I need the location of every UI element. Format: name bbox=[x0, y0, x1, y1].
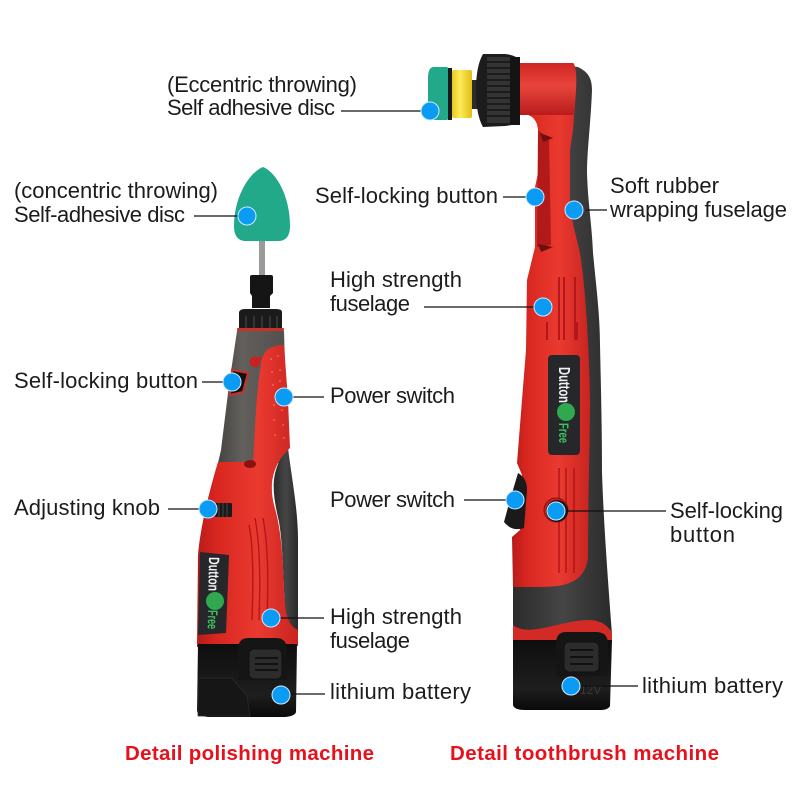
label: high strength fuselage, polishing machine: High strength bbox=[330, 604, 462, 629]
label: soft rubber: Soft rubber bbox=[610, 173, 719, 198]
label: power switch, polishing machine: Power switch bbox=[330, 383, 455, 408]
adjusting knob bbox=[215, 503, 232, 517]
label: high strength fuselage, toothbrush machine: fuselage bbox=[330, 291, 410, 316]
leader lines bbox=[168, 111, 666, 694]
label: eccentric disc: (Eccentric throwing) bbox=[167, 72, 357, 97]
flat green sponge bbox=[428, 67, 450, 120]
yellow pad bbox=[452, 70, 472, 118]
neck shading bbox=[537, 130, 551, 247]
label: eccentric disc: Self adhesive disc bbox=[167, 95, 335, 120]
screw hole bbox=[244, 460, 256, 468]
label: self-locking button, toothbrush machine body: button bbox=[670, 522, 735, 547]
neck notches bbox=[538, 133, 553, 252]
battery: 12V bbox=[580, 683, 601, 697]
dark back shell bbox=[513, 66, 612, 635]
label: soft rubber: wrapping fuselage bbox=[609, 197, 787, 222]
power switch bbox=[504, 473, 527, 529]
self-locking button bbox=[544, 498, 568, 522]
vent lines lower bbox=[559, 468, 574, 573]
label: eccentric disc bbox=[167, 72, 357, 120]
label: power switch, toothbrush machine: Power switch bbox=[330, 487, 455, 512]
label: high strength fuselage, toothbrush machine: High strength bbox=[330, 267, 462, 292]
polishing machine illustration bbox=[197, 167, 298, 717]
label: soft rubber bbox=[609, 173, 787, 222]
toothbrush machine illustration bbox=[428, 54, 612, 710]
logo panel bbox=[198, 552, 229, 635]
logo panel: Free bbox=[205, 610, 221, 629]
collar bbox=[239, 309, 282, 328]
label: self-locking button, toothbrush machine body: Self-locking bbox=[670, 498, 783, 523]
callout dots bbox=[199, 102, 583, 704]
label: concentric disc: Self-adhesive disc bbox=[14, 202, 185, 227]
self-locking button bbox=[230, 370, 248, 395]
battery bbox=[197, 638, 297, 717]
title: toothbrush machine: Detail toothbrush machine bbox=[450, 742, 719, 765]
label: concentric disc bbox=[14, 178, 218, 227]
red body bbox=[197, 345, 298, 649]
grip tab bbox=[250, 357, 262, 367]
label: high strength fuselage, polishing machine: fuselage bbox=[330, 628, 410, 653]
black knurled knob bbox=[476, 54, 520, 127]
vent lines upper bbox=[547, 277, 577, 340]
red stripe bbox=[513, 620, 612, 640]
battery bbox=[513, 632, 612, 710]
label: lithium battery, toothbrush machine: lithium battery bbox=[642, 673, 783, 698]
conical green sponge disc bbox=[234, 167, 290, 241]
logo panel: Free bbox=[556, 423, 572, 443]
metal shaft bbox=[259, 241, 265, 276]
label: lithium battery, polishing machine: lithium battery bbox=[330, 679, 471, 704]
dark rear grip bbox=[274, 448, 298, 634]
label: self-locking button, toothbrush machine body bbox=[670, 498, 783, 547]
label: concentric disc: (concentric throwing) bbox=[14, 178, 218, 203]
head highlight bbox=[520, 63, 576, 115]
label: adjusting knob: Adjusting knob bbox=[14, 495, 160, 520]
chuck bbox=[250, 275, 273, 308]
label: high strength fuselage, toothbrush machine bbox=[330, 267, 462, 316]
red head and neck bbox=[512, 63, 590, 587]
logo panel bbox=[548, 355, 580, 455]
gray upper body bbox=[218, 331, 286, 463]
vent lines bbox=[249, 518, 268, 620]
grip texture bbox=[270, 355, 285, 439]
title: polishing machine: Detail polishing machine bbox=[125, 742, 374, 765]
logo panel: Dutton bbox=[555, 367, 572, 403]
logo panel: Dutton bbox=[204, 557, 222, 591]
label: self-locking button, polishing machine: Self-locking button bbox=[14, 368, 198, 393]
label: self-locking button, toothbrush machine neck: Self-locking button bbox=[315, 183, 498, 208]
label: high strength fuselage, polishing machine bbox=[330, 604, 462, 653]
